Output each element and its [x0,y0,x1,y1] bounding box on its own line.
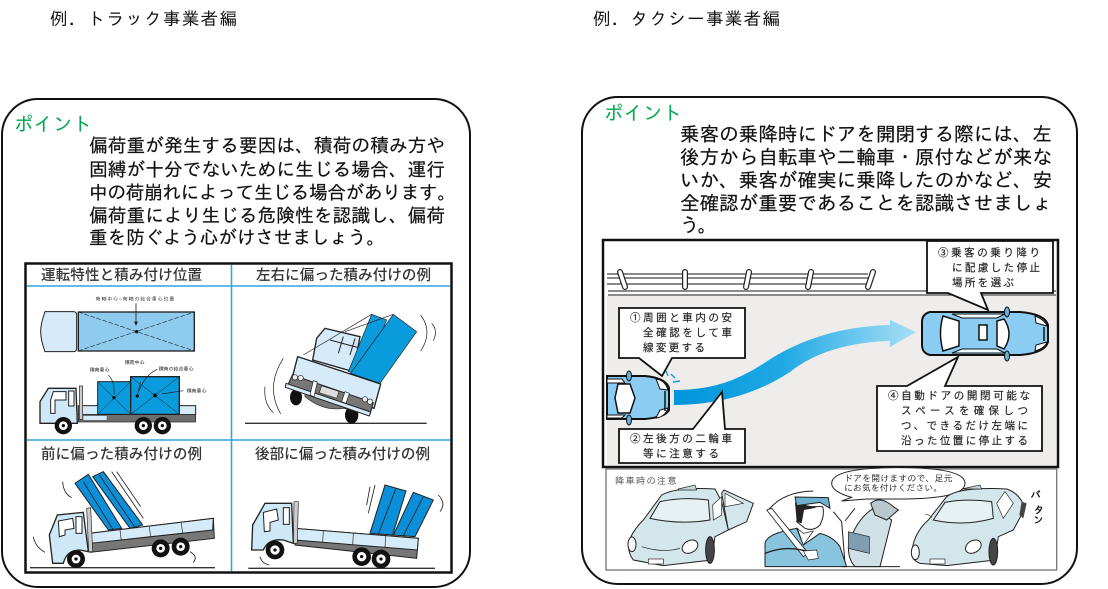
heading: driving characteristics: 後部に偏った積み付けの例 [255,446,430,463]
heading: truck example: 例．トラック事業者編 [50,9,237,29]
heading: taxi example: 例．タクシー事業者編 [593,9,780,29]
sound effect [1031,489,1044,526]
diagram: road and stopping procedure [603,240,1058,467]
callout: step 4 [877,357,1042,451]
sound effect: ン [1033,515,1043,526]
heading: driving characteristics: 運転特性と積み付け位置 [41,267,202,284]
callout: step 2 [619,392,745,463]
guardrail posts [620,272,873,287]
callout: step 1: 線変更する [643,341,705,354]
arrow: lane change path [674,320,916,405]
illustration: getting off cautions [606,468,1057,570]
car with slammed door [911,485,1027,566]
sound effect: タ [1034,504,1044,516]
callout: step 2: ②左後方の二輪車 [630,432,732,445]
callout: step 3 [927,241,1053,310]
icon: taxi before lane change [607,371,680,425]
panel: truck operators [2,99,470,587]
callout: step 3: ③乗客の乗り降り [938,246,1040,259]
illustration: truck top and side view [40,296,207,434]
illustration: front biased truck [30,472,215,568]
speech bubble: にお気を付けください。 [844,483,942,493]
chart: load placement grid [26,264,452,572]
panel: taxi operators [582,97,1077,584]
illustration: rear biased truck [248,485,443,568]
label: point: ポイント [604,103,682,125]
text block: truck guidance: 偏荷重が発生する要因は、積荷の積み方や [89,135,445,156]
text block: truck guidance: 中の荷崩れによって生じる場合があります。 [89,182,456,203]
speech bubble: ドアを開けますので、足元 [844,474,953,484]
callout: step 4: ④自動ドアの開閉可能な [888,389,1030,402]
callout: step 4: つ、できるだけ左端に [901,419,1028,432]
text block: taxi guidance: 乗客の乗降時にドアを開閉する際には、左 [680,124,1052,146]
sound effect: バ [1031,489,1041,501]
driver and passenger [765,491,900,567]
callout: step 3: に配慮した停止 [952,261,1040,274]
callout: step 2: 等に注意する [643,447,719,460]
illustration: truck top and side view: 荷軸中心=荷軸の総合重心位置 [95,296,174,303]
callout: step 4: 沿った位置に停止する [901,434,1028,447]
text block: truck guidance [89,135,456,248]
icon: taxi stopped [922,307,1048,361]
text block: taxi guidance: いか、乗客が確実に乗降したのかなど、安 [680,170,1052,192]
heading: driving characteristics [41,267,431,463]
label: point: ポイント [14,114,92,136]
heading: driving characteristics: 前に偏った積み付けの例 [41,446,202,463]
text block: taxi guidance: 全確認が重要であることを認識させましょ [680,193,1052,215]
text block: taxi guidance [680,124,1052,237]
text block: truck guidance: 偏荷重により生じる危険性を認識し、偏荷 [89,205,445,226]
callout: step 1 [619,308,745,376]
text block: truck guidance: 重を防ぐよう心がけさせましょう。 [89,227,385,248]
car with open door [628,485,753,566]
caption: 降車時の注意 [615,476,677,486]
text block: taxi guidance: う。 [680,215,717,237]
text block: taxi guidance: 後方から自転車や二輪車・原付などが来な [680,147,1052,169]
callout: step 3: 場所を選ぶ [952,276,1014,289]
text block: truck guidance: 固縛が十分でないために生じる場合、運行 [89,159,445,180]
illustration: truck top and side view: 積荷の総合重心 [159,366,194,373]
heading: driving characteristics: 左右に偏った積み付けの例 [256,267,431,284]
illustration: truck top and side view: 積荷重心 [90,366,110,373]
callout: step 4: スペースを確保しつ [901,404,1028,417]
illustration: truck top and side view: 積荷重心 [187,387,207,394]
speech bubble [832,468,965,501]
illustration: truck top and side view: 積荷中心 [125,359,145,366]
callout: step 1: ①周囲と車内の安 [630,311,732,324]
illustration: left-right biased truck [245,314,435,424]
callout: step 1: 全確認をして車 [643,326,732,339]
